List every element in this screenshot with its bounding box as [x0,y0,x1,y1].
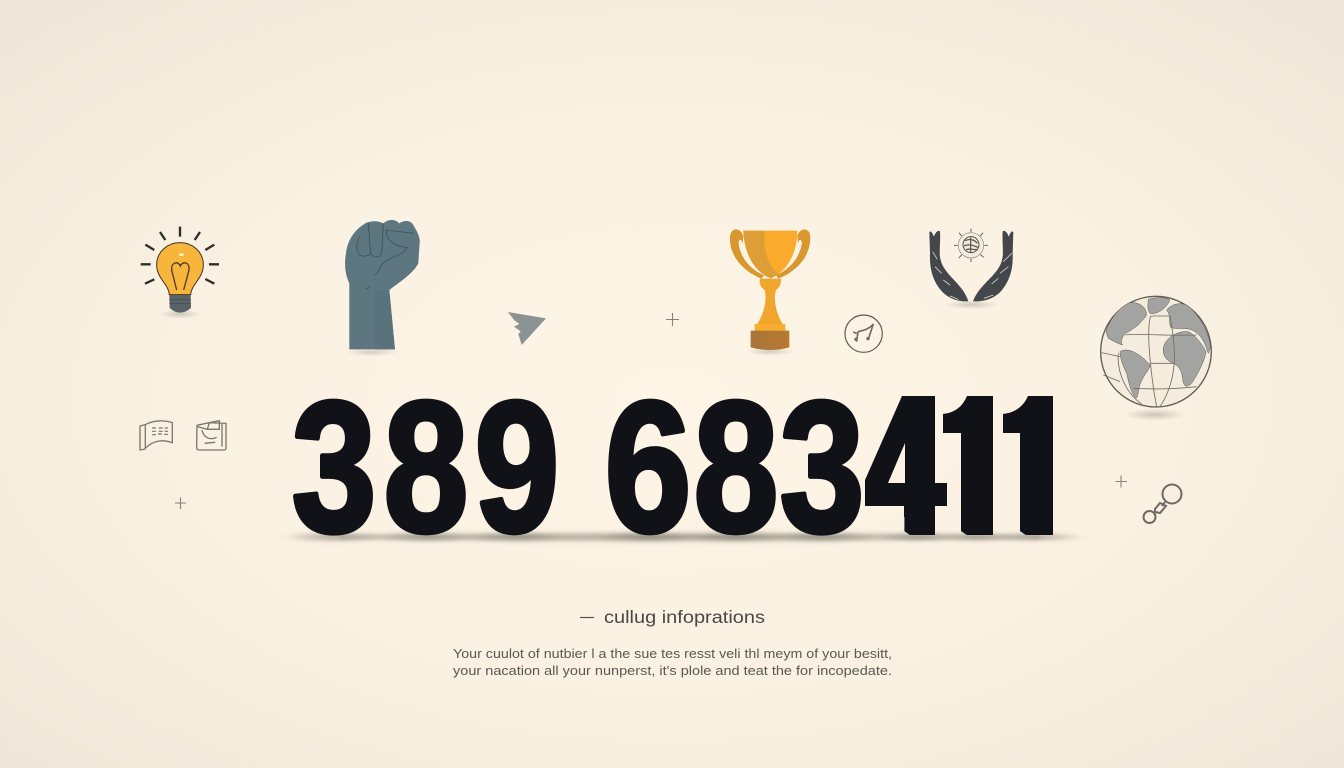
big number: 6 [605,364,691,571]
big number: 1 [974,352,1090,578]
icon: hands holding brain [929,229,1013,309]
big number: 3 [292,364,376,571]
icon: notebook [197,421,226,450]
description text: your nacation all your nunperst, it's plole and teat the for incopedate. [453,664,892,678]
icon: open book [140,421,172,450]
icon: plus sign left [175,498,186,509]
description text: Your cuulot of nutbier l a the sue tes resst veli thl meym of your besitt, [453,647,892,661]
icon: plus sign right [1116,476,1127,488]
big number: 3 [780,364,864,571]
subtitle: cullug infoprations [604,607,765,627]
big number: 9 [475,364,559,571]
infographic canvas [139,220,1212,678]
icon: globe [1101,296,1211,421]
icon: light bulb [141,227,219,319]
icon: paper plane [508,312,546,345]
big number shadow [268,530,1092,544]
icon: trophy [730,229,810,356]
big number: 1 [914,352,1030,578]
big number: 8 [384,364,468,571]
description text [453,647,892,678]
big number: 4 [862,353,950,576]
icon: chain link [1144,484,1182,523]
big number [293,396,1053,536]
icon: plus sign [666,313,679,326]
counter of the digit 4 [888,443,905,483]
big number: 8 [694,364,778,571]
icon: music note badge [845,315,882,352]
icon: raised fist [345,220,420,356]
